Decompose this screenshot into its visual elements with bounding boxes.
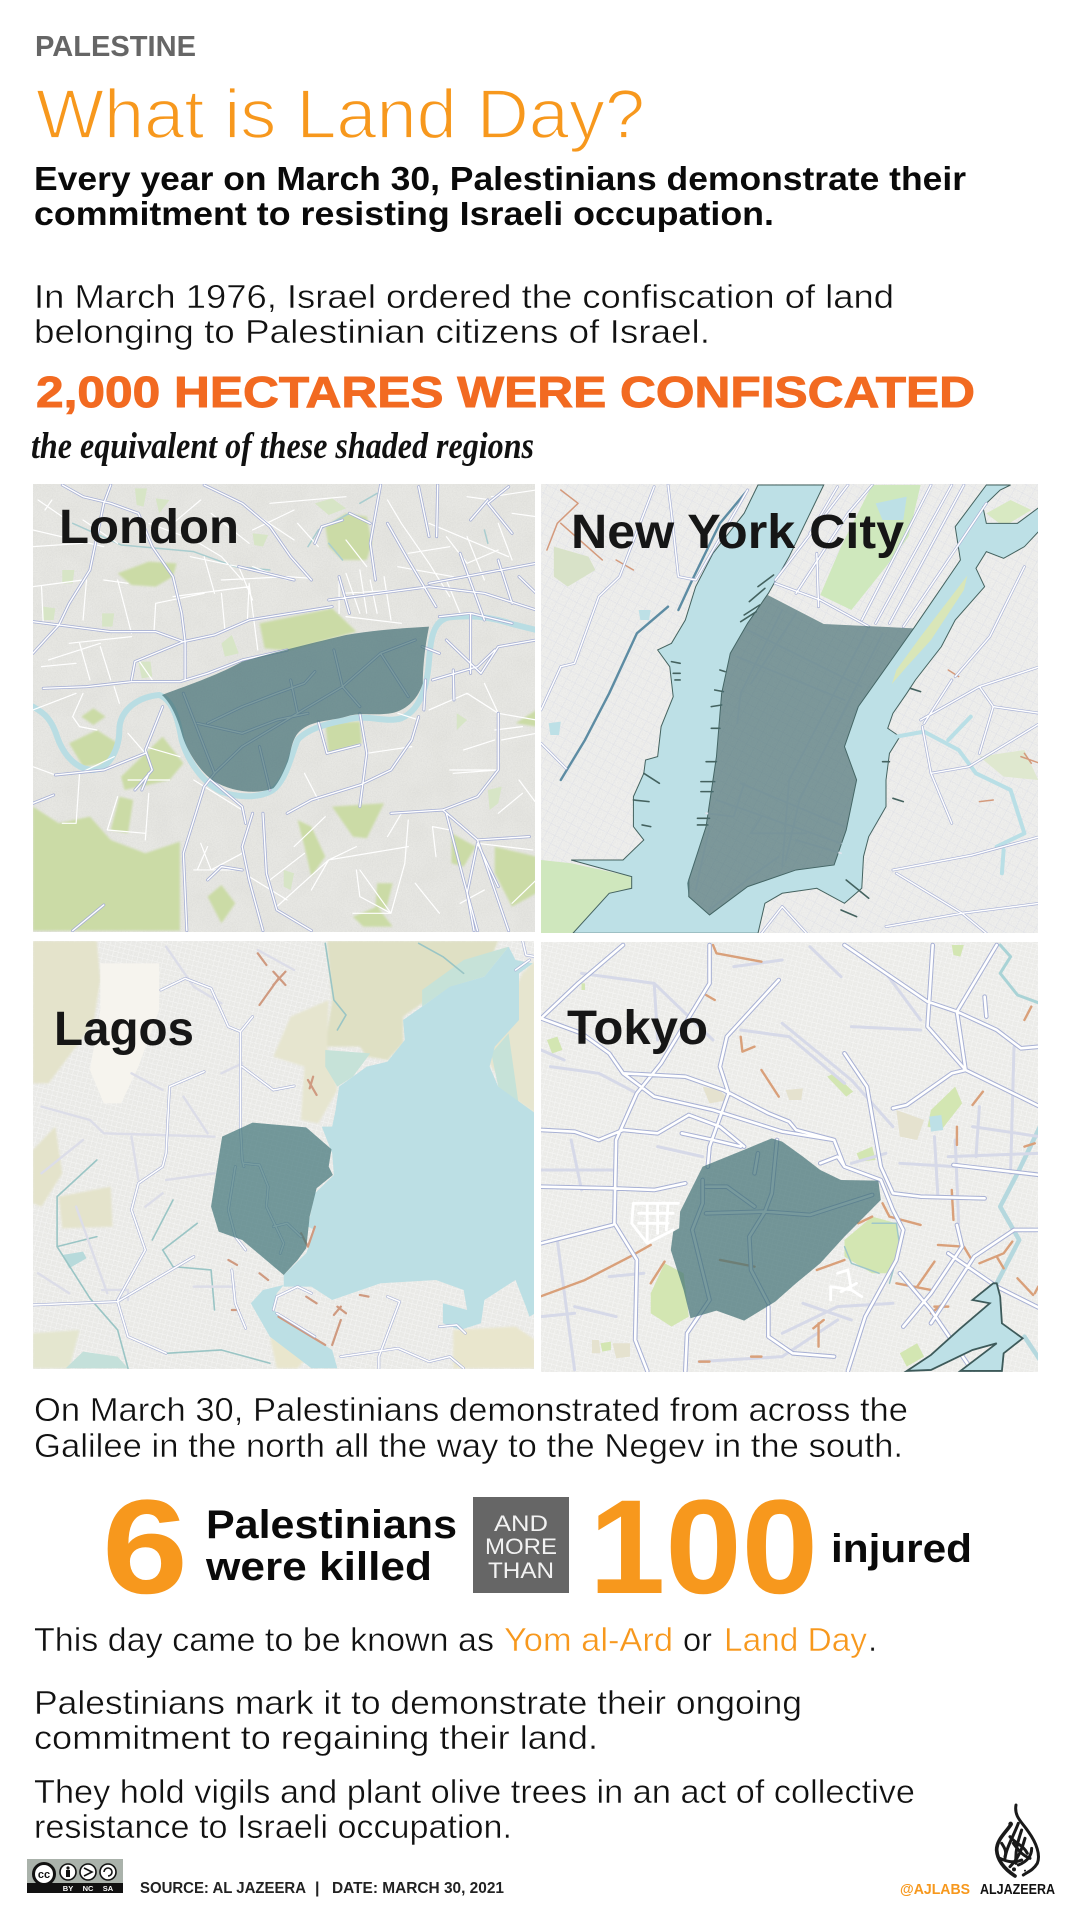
subtitle [34,160,966,232]
credit: AJLABS: @AJLABS [900,1881,970,1898]
vigils text: resistance to Israeli occupation. [34,1808,512,1845]
panel: London map [33,484,536,932]
Land Day naming text: This day came to be known as [34,1621,494,1658]
shaded region: Lagos [211,1123,333,1275]
subtitle: Every year on March 30, Palestinians demonstrate their [34,160,966,197]
stat: killed: were killed [205,1545,432,1589]
section label: PALESTINE [35,31,196,63]
source line [140,1880,504,1897]
commitment text: Palestinians mark it to demonstrate their ongoing [34,1684,802,1721]
callout: and more than: MORE [485,1534,557,1559]
Land Day naming text [34,1621,877,1658]
city label: New York City: New York City [571,506,904,559]
icon: Al Jazeera calligraphic logo [997,1805,1038,1876]
icon: creative commons badge: NC [83,1884,94,1893]
stat: killed [102,1473,457,1622]
credit: Al Jazeera wordmark: ALJAZEERA [980,1881,1055,1898]
subtitle: commitment to resisting Israeli occupation. [34,195,774,232]
icon: creative commons badge: BY [63,1884,73,1893]
commitment text [34,1684,802,1756]
title: What is Land Day? [36,75,645,153]
city label: Tokyo: Tokyo [567,1002,708,1055]
callout: and more than: THAN [488,1558,554,1583]
callout: and more than: AND [494,1511,548,1536]
city label: Lagos: Lagos [54,1003,194,1056]
stat: killed: Palestinians [206,1503,457,1547]
source line: DATE: MARCH 30, 2021 [332,1880,504,1897]
shaded region: London [162,627,429,792]
icon: creative commons badge: SA [103,1884,114,1893]
commitment text: commitment to regaining their land. [34,1719,598,1756]
headline stat: 2,000 HECTARES WERE CONFISCATED [36,368,975,417]
city label: London: London [59,501,239,554]
panel: Lagos map [33,940,535,1369]
stat: injured [589,1473,972,1622]
panel: Tokyo map [540,942,1040,1372]
protest text: Galilee in the north all the way to the Negev in the south. [34,1427,903,1464]
Land Day naming text: or [683,1621,712,1658]
protest text: On March 30, Palestinians demonstrated from across the [34,1391,908,1428]
source line: SOURCE: AL JAZEERA [140,1880,306,1897]
shaded region: Tokyo [671,1138,881,1321]
callout: and more than [473,1497,569,1593]
stat: injured: injured [831,1527,972,1571]
shaded region: New York City [687,595,914,915]
intro text: belonging to Palestinian citizens of Israel. [34,313,710,350]
vigils text: They hold vigils and plant olive trees in an act of collective [34,1773,915,1810]
Land Day naming text: Yom al-Ard [504,1621,673,1658]
Land Day naming text: Land Day [724,1621,868,1658]
icon: creative commons badge [27,1859,123,1893]
vigils text [34,1773,915,1845]
source line: | [315,1880,319,1897]
protest text [34,1391,908,1464]
intro text [34,278,894,350]
stat: injured: 100 [589,1473,818,1622]
Land Day naming text: . [868,1621,877,1658]
stat: killed: 6 [102,1473,188,1622]
maps caption: the equivalent of these shaded regions [31,426,534,467]
intro text: In March 1976, Israel ordered the confiscation of land [34,278,894,315]
panel: New York City map [541,484,1040,933]
icon: creative commons badge: cc [38,1869,50,1881]
